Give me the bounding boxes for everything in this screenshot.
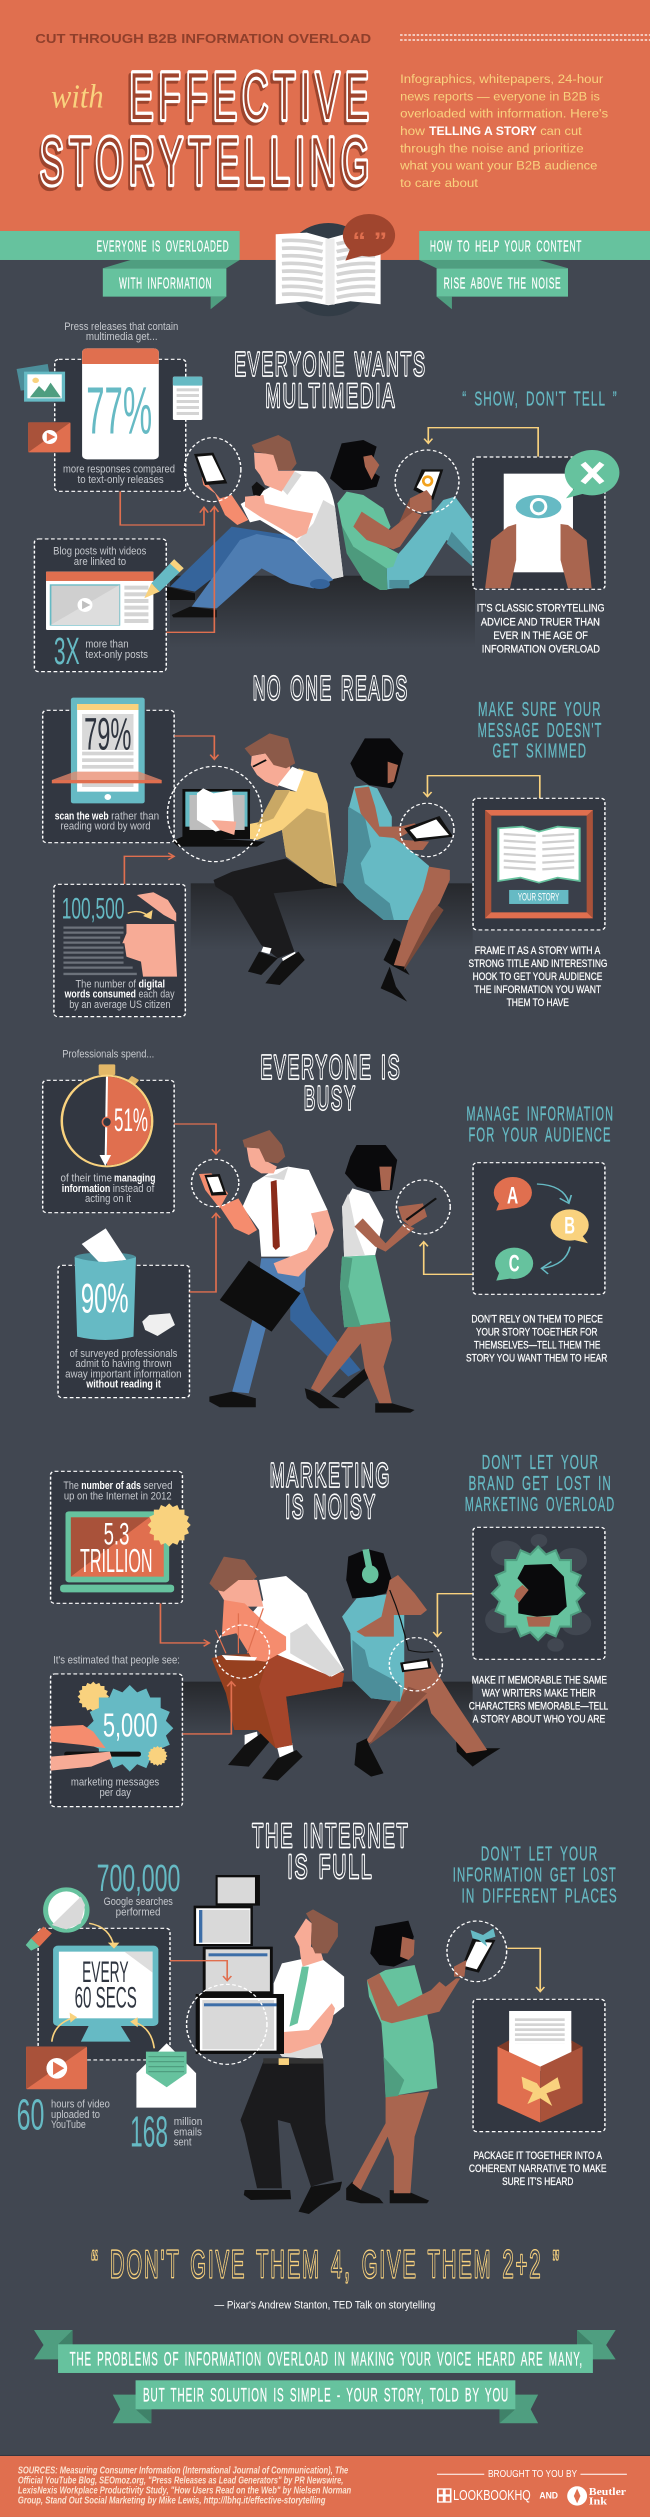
sources: LexisNexis Workplace Productivity Study, "How Users Read on the Web" by Nielsen Norman — [18, 2486, 351, 2496]
title: BUSY — [304, 1080, 357, 1117]
panel: 5.3 trillion — [51, 1471, 191, 1603]
icon: monitor — [53, 1946, 158, 2042]
and: AND — [539, 2490, 558, 2501]
stat: 168 million: million — [174, 2114, 202, 2128]
badge: a: A — [507, 1181, 518, 1209]
heading: manage information — [466, 1102, 614, 1146]
stat intro: multimedia get... — [86, 329, 158, 343]
icon: video — [28, 422, 70, 452]
icon: magnifying glass — [26, 1889, 87, 1951]
section 3: everyone is busy: EVERYONE IS — [260, 1049, 401, 1086]
icon: x bubble — [565, 450, 619, 498]
panel: 90 percent: away important information — [65, 1367, 182, 1380]
panel: memorable character — [473, 1527, 605, 1659]
tip text — [468, 944, 607, 1009]
figure: man carrying screens — [240, 1909, 344, 2214]
floor shadow — [191, 883, 473, 950]
tip text: EVER IN THE AGE OF — [493, 629, 588, 642]
section 3: everyone is busy: EVERYONE IS — [260, 1049, 401, 1086]
stat: 60 hours — [17, 2091, 110, 2139]
panel: 5.3 trillion: served — [143, 1478, 172, 1492]
connector: trillion to laptop — [160, 1603, 209, 1646]
panel: 51 percent: of their time — [61, 1171, 112, 1184]
stat: 168 million: sent — [174, 2135, 192, 2148]
connector: abc panel to stylus — [420, 1242, 473, 1274]
tip text: INFORMATION OVERLOAD — [482, 643, 600, 655]
stat: 60 hours: uploaded to — [51, 2107, 100, 2121]
stat: 168 million: 168 — [130, 2109, 168, 2156]
panel: 100,500 words: words consumed — [64, 987, 136, 1000]
stat: 60 hours: 60 — [17, 2091, 44, 2139]
icon: left hand — [485, 524, 516, 588]
panel: 90 percent: of surveyed professionals — [70, 1346, 177, 1360]
intro paragraph: overloaded with information. Here's — [400, 107, 608, 120]
header band: EVERYONE IS OVERLOADED — [97, 237, 229, 255]
sources: Official YouTube Blog, SEOmoz.org, "Press Releases as Lead Generators" by PR Newswire, — [18, 2476, 343, 2486]
kicker: CUT THROUGH B2B INFORMATION OVERLOAD — [35, 31, 371, 47]
tip text — [469, 2149, 607, 2188]
tip text: SURE IT'S HEARD — [502, 2175, 574, 2188]
intro paragraph: news reports — everyone in B2B is — [400, 90, 600, 103]
stat intro — [64, 319, 178, 343]
section 2: no one reads: NO ONE READS — [253, 669, 409, 706]
section 4: marketing is noisy — [51, 1450, 615, 1807]
panel: 5.3 trillion: TRILLION — [80, 1542, 153, 1579]
section 5: the internet is full — [17, 1817, 618, 2214]
icon: email envelope — [136, 2043, 196, 2108]
figure: woman with tablet — [346, 1921, 495, 2203]
logo: lookbookhq: LOOKBOOKHQ — [453, 2487, 531, 2504]
panel: 5.3 trillion: number of ads — [81, 1478, 141, 1492]
panel: 51 percent: information — [62, 1181, 110, 1195]
arrows between badges — [537, 1184, 571, 1274]
panel: 5,000 messages — [51, 1674, 182, 1807]
panel: show don't tell — [473, 450, 619, 589]
left ribbon — [0, 231, 240, 309]
highlight circle: stylus — [396, 1180, 450, 1234]
highlight circle: laptop — [167, 766, 262, 862]
panel: 79 percent — [43, 698, 174, 843]
panel: 100,500 words — [54, 884, 185, 1017]
icon: open book — [276, 214, 395, 316]
floor shadow — [170, 576, 475, 648]
heading: make sure — [478, 697, 602, 762]
panel: blog posts: text-only posts — [85, 647, 148, 661]
highlight circle: laptop — [216, 1625, 269, 1678]
title — [252, 1817, 410, 1885]
section 5: the internet is full: 700,000 — [97, 1857, 180, 1900]
figure: seated man with laptop — [172, 733, 337, 985]
intro paragraph — [399, 72, 608, 190]
connector: panel to laptop — [174, 736, 218, 759]
tip text — [466, 1313, 608, 1364]
connector: tablet to package — [507, 1948, 544, 1992]
intro paragraph: to care about — [400, 176, 478, 190]
intro paragraph: how — [400, 124, 425, 138]
panel: 79 percent: scan the web — [55, 809, 109, 822]
section 4: marketing is noisy: IS NOISY — [285, 1488, 377, 1525]
title: BUSY — [304, 1080, 357, 1117]
with: with — [51, 78, 104, 115]
highlight circle: phone — [192, 1159, 239, 1207]
panel: 5,000 messages: marketing messages — [71, 1775, 159, 1788]
icon: bow — [522, 2077, 561, 2106]
title: IS FULL — [287, 1848, 374, 1885]
panel: 77 percent: 77% — [86, 373, 152, 447]
closing section — [0, 2244, 650, 2517]
connectors — [120, 491, 218, 632]
panel: your story — [473, 798, 605, 930]
panel: 51 percent: acting on it — [85, 1191, 131, 1205]
icon: pencil — [144, 559, 184, 598]
connector: words to laptop — [124, 853, 174, 884]
stat: 700,000 searches: performed — [116, 1905, 160, 1918]
panel: 90 percent: admit to having thrown — [75, 1356, 172, 1370]
quote attribution: — Pixar's Andrew Stanton, TED Talk on storytelling — [214, 2298, 435, 2311]
intro paragraph: what you want your B2B audience — [399, 159, 597, 172]
highlight circle: screens — [187, 1984, 267, 2064]
banner 1 — [34, 2330, 616, 2373]
panel: 77 percent — [55, 348, 186, 491]
panel: 77 percent: to text-only releases — [78, 472, 164, 486]
section 3: everyone is busy — [43, 1047, 614, 1413]
stat: 168 million: emails — [174, 2125, 202, 2138]
panel: 100,500 words: by an average US citizen — [69, 997, 170, 1011]
title — [253, 669, 409, 706]
stat intro: Professionals spend... — [62, 1047, 154, 1060]
footer — [0, 2455, 650, 2517]
connector: every 60 secs to screens — [170, 1961, 231, 1981]
title — [234, 345, 427, 414]
section 2: no one reads — [43, 669, 607, 1017]
panel: blog posts: more than — [85, 637, 129, 650]
title — [260, 1049, 401, 1117]
icon: stopwatch — [62, 1064, 152, 1166]
section 4: marketing is noisy: MARKETING — [270, 1456, 391, 1493]
sources — [18, 2465, 351, 2506]
panel: 100,500 words: each day — [138, 987, 175, 1000]
icon: document — [173, 377, 202, 420]
panel: 90 percent — [58, 1228, 189, 1398]
icon: hands with phone — [51, 1725, 141, 1771]
heading: don't let your brand — [465, 1450, 615, 1515]
highlight circle: tablet — [400, 803, 454, 857]
icon: trash can — [75, 1228, 136, 1340]
highlight circle: phone — [389, 1638, 442, 1691]
icon: video — [26, 2047, 87, 2089]
icon: woman's head — [514, 1564, 567, 1627]
title: effective — [127, 59, 374, 138]
panel: blog posts: Blog posts with videos — [53, 544, 146, 557]
panel: 100,500 words: 100,500 — [62, 892, 124, 926]
stat intro: It's estimated that people see: — [53, 1653, 180, 1666]
intro paragraph: Infographics, whitepapers, 24-hour — [400, 72, 604, 86]
panel: 79 percent: 79% — [84, 709, 131, 759]
tip text — [469, 1674, 608, 1725]
stat: 5.3 trillion — [80, 1516, 153, 1579]
stat: 60 hours: YouTube — [51, 2117, 86, 2131]
tip text: ADVICE AND TRUER THAN — [481, 616, 600, 628]
panel: 51 percent: managing — [114, 1171, 155, 1184]
title: MULTIMEDIA — [265, 377, 396, 414]
badge: c: C — [509, 1249, 519, 1277]
panel: abc sequence — [473, 1163, 605, 1294]
panel: blog posts: 3X — [54, 630, 80, 673]
panel: 51 percent: 51% — [114, 1102, 148, 1138]
floor shadow — [182, 1682, 473, 1738]
tip text — [477, 602, 604, 655]
icon: crumpled paper — [142, 1313, 175, 1336]
title: storytelling — [38, 124, 374, 203]
logo: beutler ink — [567, 2485, 627, 2507]
stat: 5.3 trillion: 5.3 — [104, 1516, 129, 1551]
section 4: marketing is noisy: MARKETING — [270, 1456, 391, 1493]
icon: photo — [17, 364, 65, 402]
figure: walking woman with stylus — [305, 1145, 436, 1413]
stat: 700,000 searches — [97, 1857, 180, 1918]
section 2: no one reads: NO ONE READS — [253, 669, 409, 706]
icon: laptop — [60, 1511, 174, 1592]
icon: stacked screens — [194, 1875, 284, 2054]
figure: seated woman with tablet — [343, 738, 453, 1002]
intro paragraph: can cut — [540, 124, 582, 138]
panel: 100,500 words: The number of — [75, 977, 136, 990]
panel: your story: YOUR STORY — [518, 890, 560, 903]
highlight circle: woman's tablet — [395, 450, 459, 513]
connector: brand panel to phone — [433, 1594, 473, 1637]
icon: yellow badge — [148, 1503, 191, 1547]
logo: lookbookhq — [438, 2487, 531, 2504]
logo: beutler ink: Ink — [589, 2495, 607, 2507]
section 1: everyone wants multimedia — [17, 319, 619, 673]
icon: monitor: EVERY — [82, 1955, 129, 1989]
intro paragraph: through the noise and prioritize — [400, 142, 584, 155]
panel: 100,500 words: digital — [138, 977, 165, 990]
panel: 51 percent: instead of — [113, 1181, 155, 1195]
panel: 79 percent: rather than — [111, 809, 159, 822]
figure: man holding head — [209, 1557, 344, 1781]
section 5: the internet is full: THE INTERNET — [252, 1817, 410, 1854]
banner 2 — [113, 2380, 538, 2423]
badge: b: B — [564, 1211, 575, 1239]
header band — [0, 0, 650, 316]
panel: 5,000 messages: per day — [100, 1785, 131, 1799]
yellow arrows — [52, 1923, 154, 2048]
title: MULTIMEDIA — [265, 377, 396, 414]
intro paragraph: TELLING A STORY — [429, 124, 537, 138]
icon: framed book — [498, 827, 580, 883]
stat: 60 hours: hours of video — [51, 2097, 110, 2110]
stat: 700,000 searches: Google searches — [104, 1894, 173, 1908]
brought to you by: BROUGHT TO YOU BY — [488, 2469, 577, 2480]
figure: seated woman with tablet — [330, 440, 473, 590]
stat: 5,000: 5,000 — [103, 1707, 158, 1744]
panel: every 60 secs — [38, 1928, 170, 2060]
stat intro: Press releases that contain — [64, 319, 178, 333]
icon: open head — [122, 892, 177, 977]
panel: 90 percent: without reading it — [86, 1377, 161, 1390]
icon: right hand — [561, 524, 592, 588]
sources: SOURCES: Measuring Consumer Information (International Journal of Communication), The — [18, 2465, 348, 2476]
figure: woman with headphones — [342, 1549, 500, 1777]
highlight circle: man's tablet — [184, 438, 241, 502]
connector: 5000 to laptop — [182, 1682, 235, 1734]
figure: walking man with briefcase — [199, 1130, 368, 1407]
panel: blog posts — [34, 539, 166, 673]
highlight circle: tablet — [447, 1921, 507, 1982]
panel: 51 percent — [43, 1064, 174, 1213]
heading: don't let your information — [453, 1842, 618, 1907]
panel: blog posts: are linked to — [74, 554, 126, 568]
title — [270, 1456, 391, 1525]
left ribbon: WITH INFORMATION — [119, 274, 212, 292]
icon: monitor: 60 SECS — [75, 1981, 137, 2015]
sub-section group — [17, 319, 619, 673]
section 5: the internet is full: THE INTERNET — [252, 1817, 410, 1854]
panel: 5.3 trillion: The — [63, 1478, 79, 1492]
icon: quote bubble: “ ” — [352, 227, 387, 254]
icon: trash can: 90% — [81, 1274, 129, 1321]
sources: Group, Stand Out Social Marketing by Mike Lewis, http://lbhq.it/effective-storytelling — [18, 2496, 326, 2506]
logo: beutler ink: Beutler — [589, 2485, 627, 2498]
panel: gift package — [473, 1999, 605, 2132]
title: IS FULL — [287, 1848, 374, 1885]
section 4: marketing is noisy: IS NOISY — [285, 1488, 377, 1525]
panel: 79 percent: reading word by word — [61, 819, 150, 832]
connector: eye panel to tablet — [424, 428, 538, 457]
figure: seated man with tablet — [167, 435, 343, 617]
right ribbon — [419, 231, 650, 309]
panel: 5.3 trillion: up on the Internet in 2012 — [64, 1489, 172, 1502]
tip text: THEM TO HAVE — [507, 996, 569, 1009]
connectors — [174, 1124, 220, 1292]
panel: 77 percent: more responses compared — [63, 462, 175, 475]
connector: frame to tablet — [423, 776, 540, 798]
